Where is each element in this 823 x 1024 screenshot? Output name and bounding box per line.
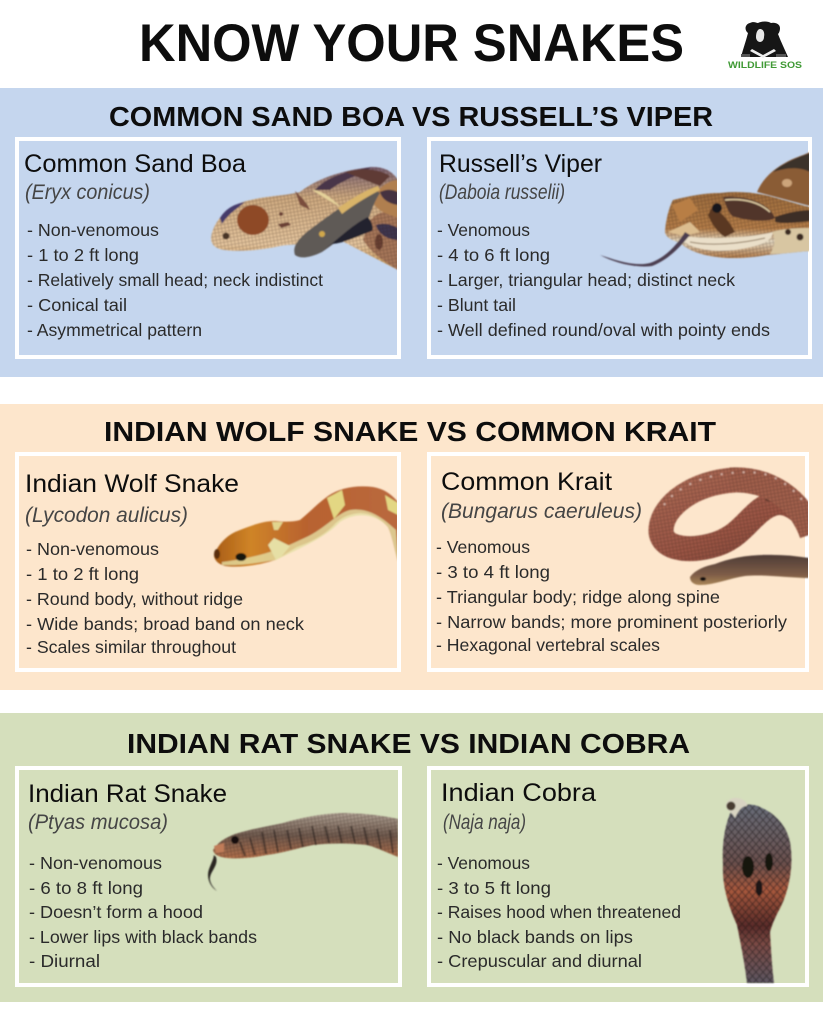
traits list: - Diurnal [29,951,100,971]
traits list: - 1 to 2 ft long [26,564,139,584]
scientific name: (Lycodon aulicus) [25,504,188,527]
traits list: - Blunt tail [437,295,516,315]
traits list: - Non-venomous [26,539,159,559]
card: Russell's viper [429,139,810,357]
traits list [437,220,770,340]
traits list: - Hexagonal vertebral scales [436,635,660,655]
traits list [29,853,257,971]
traits list: - Wide bands; broad band on neck [26,614,304,634]
traits list: - Conical tail [27,295,127,315]
scientific name: (Naja naja) [443,811,526,834]
traits list [27,220,323,340]
traits list: - 1 to 2 ft long [27,245,139,265]
snake image: common krait [661,472,812,585]
traits list: - Venomous [436,537,530,557]
snake image: Indian cobra [723,798,791,983]
traits list: - 4 to 6 ft long [437,245,550,265]
heading: INDIAN RAT SNAKE VS INDIAN COBRA [127,728,690,759]
traits list: - Round body, without ridge [26,589,243,609]
traits list: - 6 to 8 ft long [29,878,143,898]
snake image: sand boa [211,167,398,270]
traits list: - Non-venomous [29,853,162,873]
traits list: - Venomous [437,853,530,873]
species name: Common Krait [441,468,612,496]
card: Indian cobra [429,768,807,985]
traits list: - Relatively small head; neck indistinct [27,270,323,290]
card: Indian wolf snake [17,454,399,670]
panel: sand boa vs Russell's viper [0,88,823,377]
species name: Common Sand Boa [24,150,246,178]
species name: Indian Cobra [441,779,596,807]
logo wordmark: WILDLIFE SOS [728,60,802,71]
traits list: - Non-venomous [27,220,159,240]
heading: INDIAN WOLF SNAKE VS COMMON KRAIT [104,416,716,447]
scientific name: (Eryx conicus) [25,181,150,204]
species name: Indian Wolf Snake [25,470,239,498]
traits list: - Narrow bands; more prominent posteriorly [436,612,787,632]
traits list: - Raises hood when threatened [437,902,681,922]
species name: Indian Rat Snake [28,780,227,808]
traits list: - 3 to 4 ft long [436,562,550,582]
snake image: Russell's viper [600,152,810,266]
species name: Russell’s Viper [439,150,602,178]
traits list: - Doesn’t form a hood [29,902,203,922]
traits list: - Larger, triangular head; distinct neck [437,270,735,290]
traits list: - Lower lips with black bands [29,927,257,947]
traits list: - Triangular body; ridge along spine [436,587,720,607]
traits list [437,853,681,971]
title: KNOW YOUR SNAKES [139,14,684,73]
traits list: - Well defined round/oval with pointy ends [437,320,770,340]
scientific name: (Ptyas mucosa) [28,811,168,834]
icon: sloth bear [741,22,788,58]
traits list: - Venomous [437,220,530,240]
card: common krait [429,454,812,670]
scientific name: (Bungarus caeruleus) [441,500,642,523]
traits list: - 3 to 5 ft long [437,878,551,898]
panel: rat snake vs cobra [0,713,823,1002]
card: common sand boa [17,139,399,357]
traits list [26,539,304,657]
panel: wolf snake vs krait [0,404,823,690]
snake image: Indian wolf snake [214,486,398,567]
traits list: - No black bands on lips [437,927,633,947]
snake image: Indian rat snake [208,813,398,891]
scientific name: (Daboia russelii) [439,181,565,204]
heading: COMMON SAND BOA VS RUSSELL’S VIPER [109,101,713,132]
logo: Wildlife SOS [728,22,802,71]
traits list: - Crepuscular and diurnal [437,951,642,971]
traits list [436,537,787,655]
traits list: - Asymmetrical pattern [27,320,202,340]
card: Indian rat snake [17,768,400,985]
traits list: - Scales similar throughout [26,637,236,657]
